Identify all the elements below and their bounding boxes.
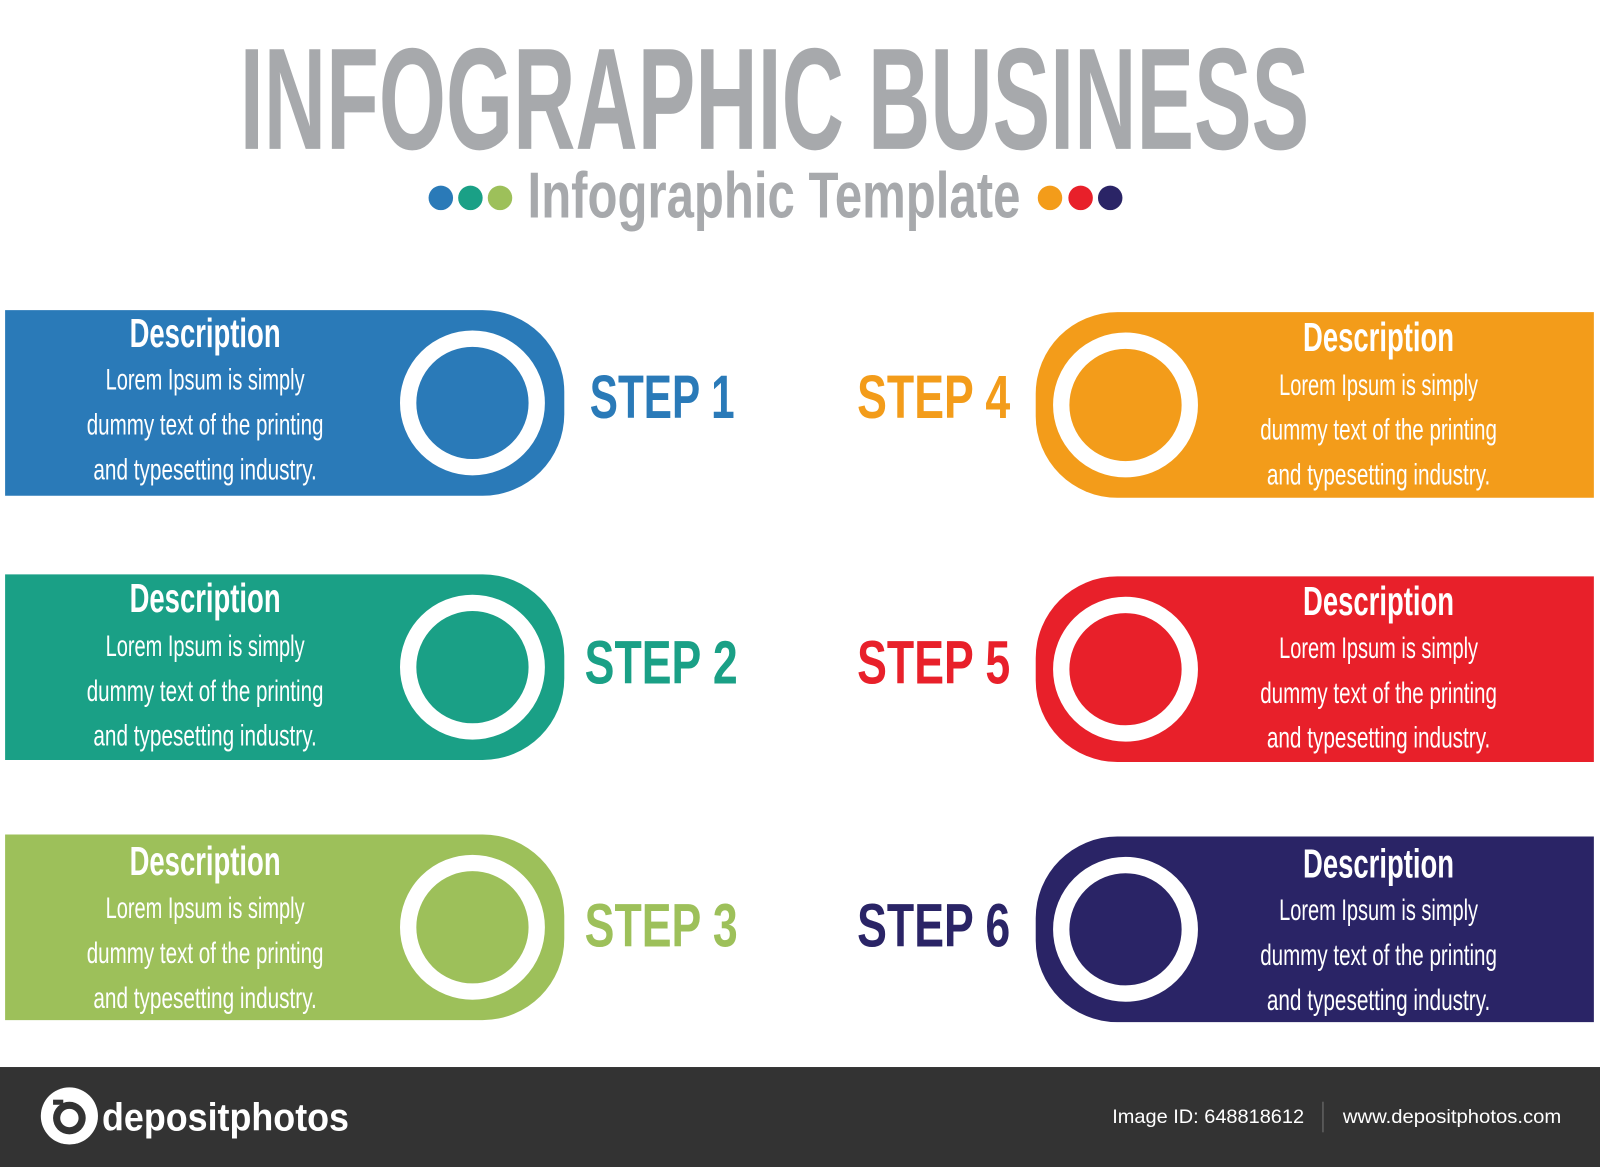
label: step 3: STEP 3 — [585, 892, 738, 960]
panel: step 6 — [1036, 836, 1594, 1022]
panel: step 6: and typesetting industry. — [1267, 984, 1490, 1017]
panel: step 4: Lorem Ipsum is simply — [1279, 369, 1478, 402]
label: step 4: STEP 4 — [857, 363, 1010, 431]
panel: step 2: dummy text of the printing — [87, 675, 323, 708]
panel: step 4 — [1036, 312, 1594, 498]
panel: step 1: Description — [130, 310, 281, 356]
panel: step 2 — [5, 574, 564, 760]
panel: step 5: dummy text of the printing — [1260, 677, 1497, 710]
panel: step 3: and typesetting industry. — [93, 982, 317, 1015]
panel: step 5: Description — [1303, 578, 1454, 624]
panel: step 4: Description — [1303, 314, 1454, 360]
panel: step 3: dummy text of the printing — [87, 937, 323, 970]
panel: step 6: Lorem Ipsum is simply — [1279, 894, 1478, 927]
panel: step 5: and typesetting industry. — [1267, 722, 1490, 755]
dots left — [429, 186, 512, 210]
footer bar — [0, 1067, 1600, 1167]
icon: camera logo — [41, 1087, 98, 1145]
panel: step 1: Lorem Ipsum is simply — [106, 364, 305, 397]
subtitle: Infographic Template — [528, 158, 1020, 231]
panel: step 5: Lorem Ipsum is simply — [1279, 632, 1478, 665]
footer image id: Image ID: 648818612 — [1112, 1106, 1304, 1128]
panel: step 3: Lorem Ipsum is simply — [106, 892, 305, 925]
panel: step 4: and typesetting industry. — [1267, 459, 1490, 492]
panel: step 2: Description — [130, 575, 281, 621]
panel: step 2: and typesetting industry. — [93, 720, 317, 753]
panel: step 3 — [5, 834, 564, 1020]
panel: step 1: and typesetting industry. — [93, 453, 317, 486]
panel: step 6: Description — [1303, 840, 1454, 886]
panel: step 3: Description — [130, 838, 281, 884]
panel: step 2: Lorem Ipsum is simply — [106, 630, 305, 663]
footer logo text: depositphotos — [102, 1096, 349, 1139]
panel: step 1 — [5, 310, 564, 496]
dots right — [1038, 186, 1122, 210]
panel: step 1: dummy text of the printing — [87, 409, 323, 442]
panel: step 6: dummy text of the printing — [1260, 939, 1497, 972]
label: step 6: STEP 6 — [857, 892, 1010, 960]
footer url: www.depositphotos.com — [1342, 1106, 1561, 1128]
panel: step 4: dummy text of the printing — [1260, 414, 1497, 447]
label: step 2: STEP 2 — [585, 628, 738, 696]
panel: step 5 — [1036, 576, 1594, 762]
label: step 1: STEP 1 — [590, 363, 735, 431]
label: step 5: STEP 5 — [857, 628, 1010, 696]
